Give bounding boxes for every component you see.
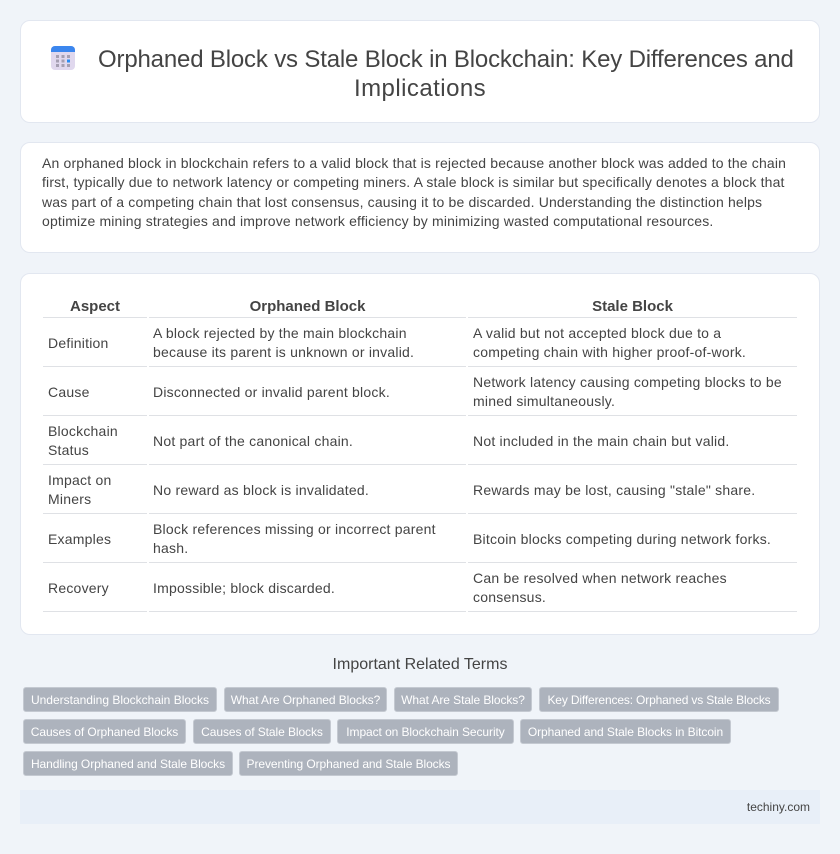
related term tags: Impact on Blockchain Security <box>346 725 505 739</box>
text block: introduction: An orphaned block in blockchain refers to a valid block that is rejected because another block was added to the chain <box>42 155 786 171</box>
related term tags: Causes of Orphaned Blocks <box>31 725 178 739</box>
row: impact on miners: Impact on <box>48 472 111 488</box>
row: definition <box>48 325 746 360</box>
row: cause: Network latency causing competing blocks to be <box>473 374 782 390</box>
footer: site name: techiny.com <box>747 800 810 814</box>
row: definition: Definition <box>48 335 109 351</box>
title: Implications <box>354 75 486 102</box>
row: impact on miners: Rewards may be lost, causing "stale" share. <box>473 482 755 498</box>
row: cause: Cause <box>48 384 90 400</box>
row: blockchain status: Not part of the canonical chain. <box>153 433 353 449</box>
related term tags: What Are Orphaned Blocks? <box>231 693 380 707</box>
row: definition: competing chain with higher proof-of-work. <box>473 344 746 360</box>
row: examples: hash. <box>153 540 188 556</box>
row: examples: Examples <box>48 531 111 547</box>
row: examples <box>48 521 771 556</box>
row: definition: because its parent is unknown or invalid. <box>153 344 414 360</box>
row: cause: Disconnected or invalid parent block. <box>153 384 390 400</box>
related term tags: Key Differences: Orphaned vs Stale Blocks <box>547 693 771 707</box>
row: recovery: consensus. <box>473 589 546 605</box>
row: impact on miners <box>48 472 755 507</box>
related term tags: Causes of Stale Blocks <box>201 725 323 739</box>
row: cause <box>48 374 782 409</box>
row: definition: A block rejected by the main blockchain <box>153 325 407 341</box>
row: examples: Bitcoin blocks competing during network forks. <box>473 531 771 547</box>
heading: related terms: Important Related Terms <box>333 656 507 673</box>
table header: Stale Block <box>592 298 673 315</box>
icon: calendar grid <box>51 46 75 70</box>
text block: introduction <box>42 155 786 229</box>
table header: Orphaned Block <box>250 298 365 315</box>
related term tags <box>23 687 779 776</box>
row: impact on miners: Miners <box>48 491 91 507</box>
row: recovery <box>48 570 727 605</box>
row: recovery: Impossible; block discarded. <box>153 580 335 596</box>
related term tags: Handling Orphaned and Stale Blocks <box>31 757 225 771</box>
table header <box>70 298 673 315</box>
related term tags: Preventing Orphaned and Stale Blocks <box>247 757 450 771</box>
text block: introduction: optimize mining strategies and improve network efficiency by minimizing wasted computational resources. <box>42 213 713 229</box>
panel: comparison table <box>20 273 820 635</box>
related term tags: Understanding Blockchain Blocks <box>31 693 209 707</box>
row: recovery: Recovery <box>48 580 109 596</box>
row: blockchain status <box>48 423 730 458</box>
row: examples: Block references missing or incorrect parent <box>153 521 436 537</box>
row: blockchain status: Blockchain <box>48 423 118 439</box>
footer <box>20 790 820 824</box>
row: definition: A valid but not accepted block due to a <box>473 325 721 341</box>
row: blockchain status: Not included in the main chain but valid. <box>473 433 730 449</box>
row: cause: mined simultaneously. <box>473 393 615 409</box>
title <box>98 46 794 102</box>
panel: introduction <box>20 142 820 253</box>
row: blockchain status: Status <box>48 442 89 458</box>
text block: introduction: was part of a competing chain that lost consensus, causing it to be discarded. Understanding the distinction helps <box>42 194 762 210</box>
row: impact on miners: No reward as block is invalidated. <box>153 482 369 498</box>
text block: introduction: first, typically due to network latency or competing miners. A stale block is similar but specifically denotes a block that <box>42 174 785 190</box>
panel: title card <box>20 20 820 123</box>
title: Orphaned Block vs Stale Block in Blockchain: Key Differences and <box>98 46 794 73</box>
table header: Aspect <box>70 298 120 315</box>
row: recovery: Can be resolved when network reaches <box>473 570 727 586</box>
related term tags: Orphaned and Stale Blocks in Bitcoin <box>528 725 723 739</box>
related term tags: What Are Stale Blocks? <box>401 693 525 707</box>
